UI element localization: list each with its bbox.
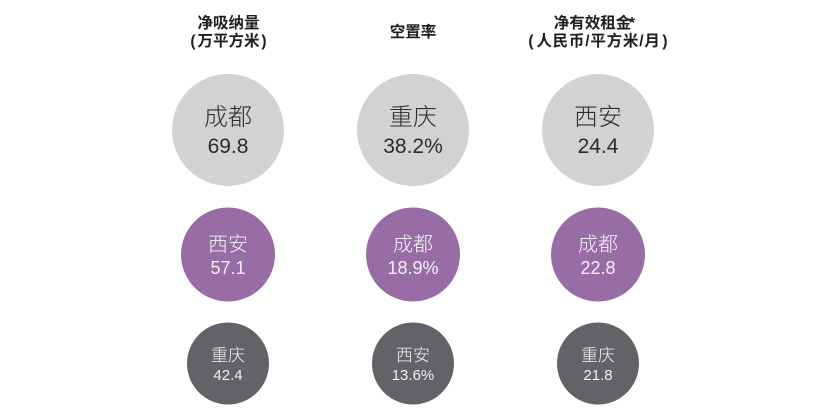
circle: rent, Chongqing 21.8: 21.8 — [583, 367, 613, 384]
heading: net effective rent: 人民币/平方米/月 — [536, 31, 661, 50]
circle: net absorption, Xi'an 57.1: 57.1 — [210, 258, 246, 278]
circle: net absorption, Chongqing 42.4: 42.4 — [213, 367, 243, 384]
circle: vacancy, Chongqing 38.2%: 重庆 — [389, 97, 437, 132]
heading: vacancy rate: 空置率 — [390, 22, 436, 41]
circle: vacancy, Chengdu 18.9%: 成都 — [393, 228, 433, 257]
circle: rent, Xi'an 24.4 — [542, 74, 654, 186]
circle: net absorption, Chengdu 69.8: 成都 — [204, 97, 252, 132]
circle: vacancy, Chongqing 38.2%: 38.2% — [383, 135, 443, 158]
circle: vacancy, Chongqing 38.2% — [357, 74, 469, 186]
circle: vacancy, Chengdu 18.9% — [366, 208, 460, 302]
circle: rent, Chengdu 22.8: 成都 — [578, 228, 618, 257]
heading: net effective rent: ( — [528, 33, 534, 50]
circle: rent, Chengdu 22.8: 22.8 — [580, 258, 616, 278]
circle: net absorption, Xi'an 57.1: 西安 — [208, 228, 248, 257]
heading: net absorption: 万平方米 — [197, 31, 260, 50]
circle: rent, Xi'an 24.4: 24.4 — [578, 135, 619, 158]
circle: net absorption, Chengdu 69.8: 69.8 — [208, 135, 248, 158]
heading: net absorption: 净吸纳量 — [197, 13, 260, 32]
circle: rent, Chongqing 21.8: 重庆 — [581, 341, 615, 366]
circle: vacancy, Xi'an 13.6%: 西安 — [396, 341, 430, 366]
circle: vacancy, Xi'an 13.6% — [372, 322, 454, 404]
circle: rent, Chongqing 21.8 — [557, 322, 639, 404]
circle: net absorption, Xi'an 57.1 — [181, 208, 275, 302]
circle: net absorption, Chongqing 42.4 — [187, 322, 269, 404]
circle: vacancy, Xi'an 13.6%: 13.6% — [392, 367, 434, 384]
circle: rent, Xi'an 24.4: 西安 — [574, 97, 622, 132]
heading: net effective rent: ) — [662, 33, 668, 50]
circle: vacancy, Chengdu 18.9%: 18.9% — [387, 258, 439, 278]
heading: net absorption: ( — [190, 33, 196, 50]
heading: net effective rent: 净有效租金 — [554, 13, 632, 32]
circle: rent, Chengdu 22.8 — [551, 208, 645, 302]
circle: net absorption, Chengdu 69.8 — [172, 74, 284, 186]
heading: net absorption — [190, 13, 267, 50]
circle: net absorption, Chongqing 42.4: 重庆 — [211, 341, 245, 366]
heading: net absorption: ) — [261, 33, 267, 50]
heading: net effective rent — [528, 13, 668, 50]
heading: net effective rent: * — [629, 15, 636, 32]
